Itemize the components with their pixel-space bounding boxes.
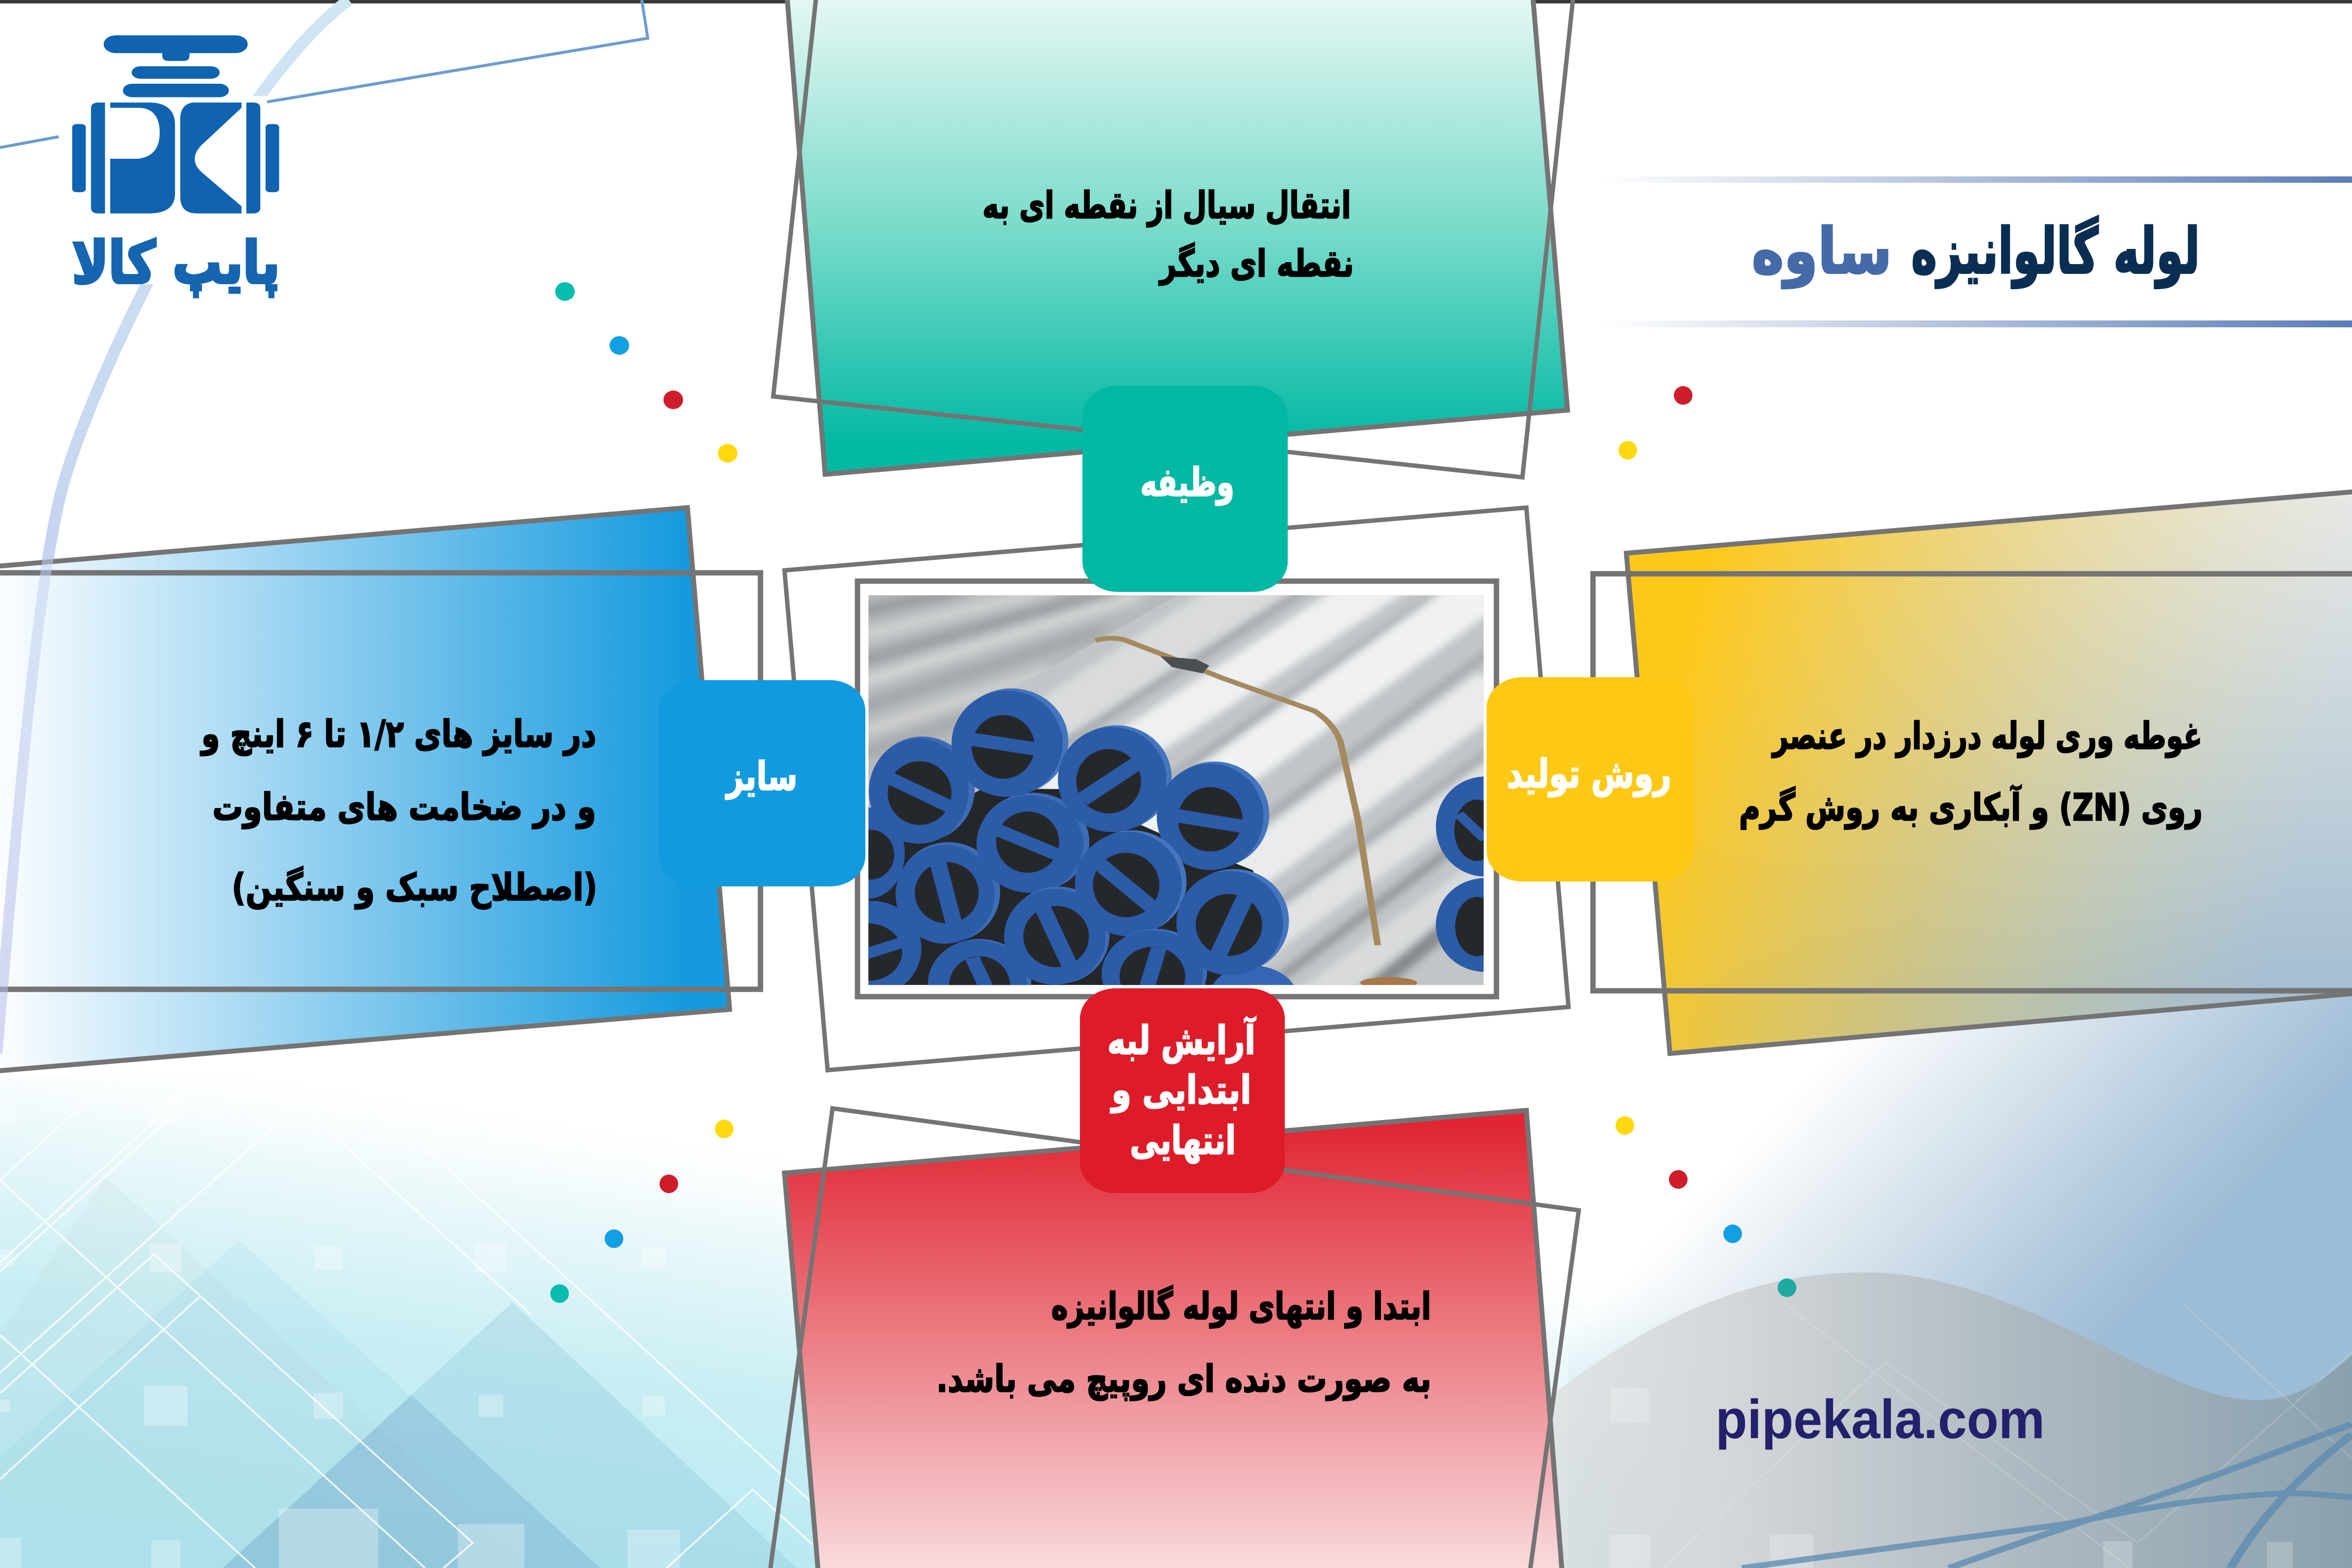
- yellow text: روی (ZN) و آبکاری به روش گرم: [1739, 784, 2203, 830]
- decorative arc: [0, 0, 349, 1054]
- tab: production method: [1487, 677, 1693, 882]
- logo outline line: [0, 137, 59, 147]
- background: cyan bottom gradient: [0, 1078, 1715, 1568]
- background: steel blue right gradient: [1568, 441, 2352, 1568]
- blue text: در سایز های ۱/۲ تا ۶ اینچ و: [200, 712, 596, 756]
- top dark bar: [0, 0, 2352, 3]
- blue text: (اصطلاح سبک و سنگین): [232, 865, 597, 909]
- blue text: و در ضخامت های متفاوت: [213, 785, 596, 829]
- background: diamond pattern: [0, 1043, 813, 1568]
- tab: production method: روش تولید: [1507, 751, 1671, 797]
- yellow panel base: [1626, 491, 2352, 1054]
- tab: end finish: ابتدایی و: [1110, 1067, 1251, 1113]
- teal text: [982, 183, 1354, 286]
- logo: [72, 35, 280, 297]
- title: [1752, 215, 2200, 289]
- dots: bottom left: [550, 1120, 734, 1303]
- arc overlay on blue panel: [0, 490, 62, 1054]
- center photo frame: [858, 581, 1496, 997]
- teal fill: [787, 0, 1568, 474]
- tab: size: سایز: [725, 754, 798, 800]
- yellow text: غوطه وری لوله درزدار در عنصر: [1771, 714, 2202, 758]
- blue fill: [0, 508, 730, 1071]
- tab: end finish: [1080, 988, 1285, 1193]
- panel: production method (yellow): [1593, 491, 2352, 1054]
- tab: end finish: انتهایی: [1130, 1118, 1236, 1164]
- red outline: [770, 1108, 1579, 1568]
- teal text: انتقال سیال از نقطه ای به: [982, 183, 1351, 227]
- tab: function: وظیفه: [1140, 460, 1234, 506]
- title blue part: ساوه: [1752, 215, 1892, 289]
- blue text: [200, 712, 597, 909]
- teal text: نقطه ای دیگر: [1158, 242, 1354, 286]
- dots: bottom right: [1616, 1116, 1796, 1297]
- photo strap clasp: [1160, 656, 1209, 673]
- yellow fill: [1626, 491, 2352, 1054]
- photo strap: [1096, 638, 1378, 945]
- title rule top: [1602, 176, 2352, 183]
- red text: ابتدا و انتهای لوله گالوانیزه: [1052, 1284, 1431, 1328]
- photo dark gaps between caps: [868, 789, 1271, 986]
- center tilted frame: [784, 508, 1568, 1070]
- title dark part: لوله گالوانیزه: [1911, 215, 2200, 288]
- red text: [936, 1284, 1431, 1401]
- dots: top right: [1618, 386, 1692, 460]
- yellow outline: [1593, 574, 2352, 991]
- panel: function (teal): [773, 0, 1573, 477]
- panel: size (blue): [0, 508, 760, 1071]
- panel: end finish (red): [770, 1108, 1579, 1568]
- tab: size: [659, 680, 865, 886]
- dots: top left: [555, 282, 737, 463]
- background: gray wave: [1455, 1273, 2352, 1568]
- panel outline line: upper left corner: [267, 0, 648, 102]
- tab: function: [1082, 386, 1288, 592]
- teal outline: [773, 0, 1573, 477]
- center photo: galvanized pipes with blue caps: [868, 595, 1484, 985]
- website url: pipekala.com: [1715, 1389, 2045, 1450]
- red text: به صورت دنده ای روپیچ می باشد.: [936, 1357, 1431, 1401]
- red fill: [784, 1110, 1562, 1568]
- background: faint pattern on wave and blue curved lines: [1609, 1304, 2352, 1568]
- logo wordmark: پایپ کالا: [72, 229, 280, 297]
- photo rust spot: [1360, 977, 1417, 985]
- logo white backing: [61, 96, 267, 284]
- photo caps: [823, 688, 1534, 1037]
- title rule bottom: [1602, 320, 2352, 327]
- tab: end finish: آرایش لبه: [1107, 1016, 1256, 1064]
- blue outline: [0, 573, 760, 989]
- logo icon: [72, 35, 279, 214]
- yellow text: [1739, 714, 2203, 830]
